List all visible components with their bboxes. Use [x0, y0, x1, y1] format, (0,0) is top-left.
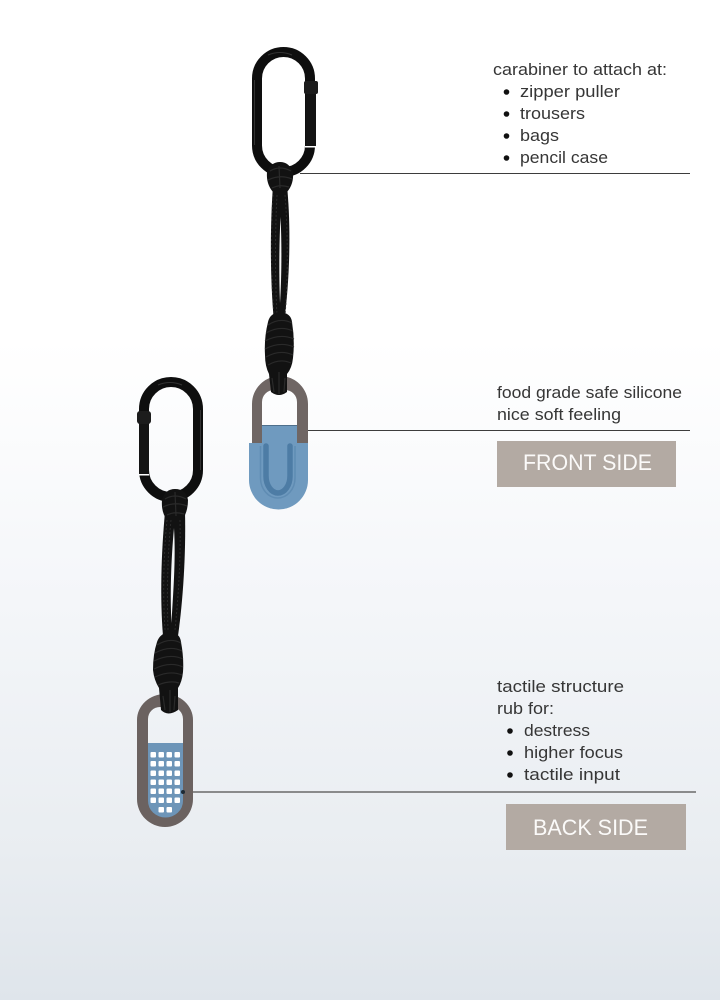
text block: carabiner uses: bags [520, 127, 559, 145]
label: front side [497, 441, 676, 487]
label: front side: FRONT SIDE [523, 450, 652, 475]
text block: silicone: food grade safe silicone [497, 384, 682, 402]
text block: carabiner uses [493, 61, 667, 167]
text block: tactile structure: tactile input [524, 766, 620, 784]
tactile dot grid [150, 752, 180, 812]
product: front side keychain [249, 52, 318, 510]
leader lines [184, 174, 696, 792]
text block: tactile structure [497, 678, 624, 784]
product: back side keychain [137, 382, 200, 827]
pendant front [249, 376, 308, 510]
text block: tactile structure: destress [524, 722, 590, 740]
text block: tactile structure: rub for: [497, 700, 554, 718]
icon: carabiner back [137, 382, 200, 497]
text block: carabiner uses: trousers [520, 105, 585, 123]
cord front [265, 162, 294, 395]
text block: carabiner uses: carabiner to attach at: [493, 61, 667, 79]
icon: carabiner front [254, 52, 318, 172]
text block: carabiner uses: pencil case [520, 149, 608, 167]
text block: tactile structure: higher focus [524, 744, 623, 762]
text block: tactile structure: tactile structure [497, 678, 624, 696]
cord back [153, 489, 188, 714]
label: back side [506, 804, 686, 850]
text block: silicone [497, 384, 682, 424]
text block: silicone: nice soft feeling [497, 406, 621, 424]
label: back side: BACK SIDE [533, 815, 648, 840]
text block: carabiner uses: zipper puller [520, 83, 621, 101]
pendant back [137, 694, 193, 827]
